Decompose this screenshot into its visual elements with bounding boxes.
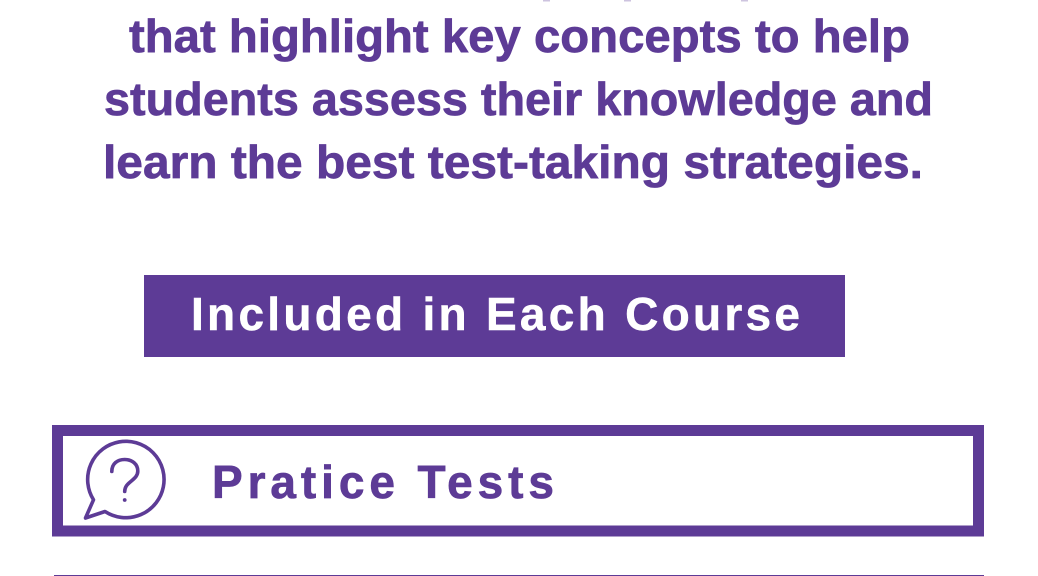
panel: Pratice Tests (58, 430, 978, 531)
label: Pratice Tests: Pratice Tests (212, 456, 554, 508)
banner: Included in Each Course (144, 275, 845, 357)
intro text block: learn the best test-taking strategies. (103, 136, 923, 188)
intro text block (103, 10, 933, 188)
intro text block: that highlight key concepts to help (129, 10, 910, 62)
clipped descenders of the cropped first text line (543, 0, 748, 2)
intro text block: students assess their knowledge and (104, 73, 933, 125)
banner: Included in Each Course: Included in Each Course (191, 288, 800, 340)
icon: speech bubble with question mark (86, 441, 164, 518)
